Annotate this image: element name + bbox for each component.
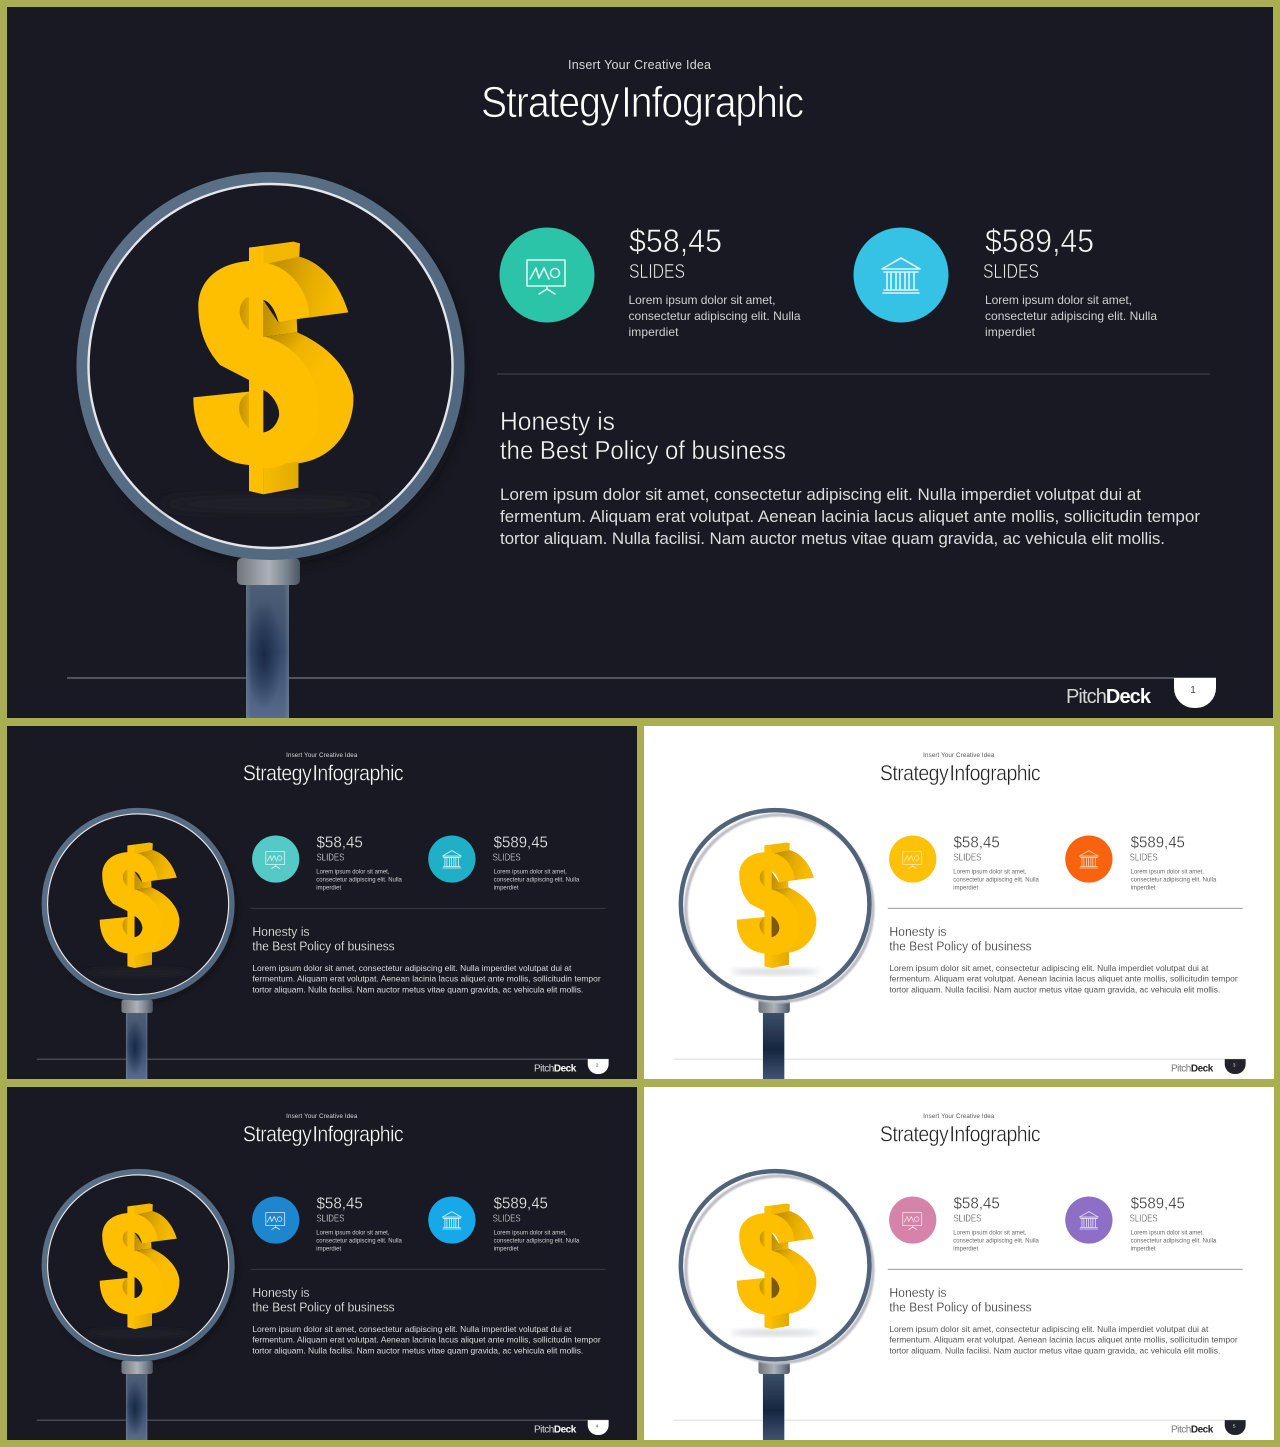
subtitle: Insert Your Creative Idea (568, 58, 711, 72)
body text: tortor aliquam. Nulla facilisi. Nam auctor metus vitae quam gravida, ac vehicula elit mollis. (500, 529, 1165, 548)
stat 2: SLIDES (493, 1214, 521, 1225)
stat 2: Lorem ipsum dolor sit amet, (985, 293, 1132, 307)
body text: Lorem ipsum dolor sit amet, consectetur adipiscing elit. Nulla imperdiet volutpat dui at (889, 963, 1209, 973)
subtitle: Insert Your Creative Idea (923, 752, 995, 759)
logo: PitchDeck (1171, 1425, 1214, 1436)
logo: PitchDeck (534, 1425, 577, 1436)
stat 2 (428, 1196, 580, 1252)
heading: the Best Policy of business (889, 938, 1032, 953)
heading: Honesty is (889, 1285, 947, 1300)
stat 2: $589,45 (1131, 835, 1185, 852)
icon: presentation board (252, 1196, 299, 1244)
footer line (67, 677, 1216, 679)
body text: fermentum. Aliquam erat volutpat. Aenean lacinia lacus aliquet ante mollis, sollicitudin tempor (889, 1335, 1238, 1345)
body text (252, 1324, 601, 1356)
page tab (588, 1059, 609, 1074)
stat 2: consectetur adipiscing elit. Nulla (494, 1238, 580, 1244)
magnifying glass with dollar (44, 1172, 236, 1440)
stat 1: consectetur adipiscing elit. Nulla (316, 1238, 403, 1244)
stat 2: imperdiet (1131, 1246, 1156, 1252)
heading (500, 406, 786, 465)
icon: presentation board (500, 228, 594, 322)
icon: presentation board (889, 835, 936, 883)
stat 1: SLIDES (317, 1214, 345, 1225)
stat 1: $58,45 (954, 835, 1000, 852)
stat 1: $58,45 (954, 1196, 1000, 1213)
stat 1 (889, 835, 1040, 891)
stat 2: $589,45 (494, 835, 548, 852)
magnifying glass with dollar (681, 1171, 873, 1440)
icon: 3D dollar sign (100, 843, 179, 968)
stat 2: consectetur adipiscing elit. Nulla (1131, 877, 1217, 883)
stat 1: $58,45 (629, 223, 722, 259)
title: Strategy Infographic (243, 761, 404, 786)
stat 1: Lorem ipsum dolor sit amet, (628, 293, 776, 307)
stat 2: imperdiet (985, 325, 1036, 339)
subtitle: Insert Your Creative Idea (923, 1113, 995, 1120)
stat 1: imperdiet (628, 325, 679, 339)
body text: Lorem ipsum dolor sit amet, consectetur adipiscing elit. Nulla imperdiet volutpat dui at (252, 1324, 572, 1334)
slide 4: small dark slide (7, 1087, 637, 1440)
page tab (588, 1420, 609, 1435)
slide 1: large dark slide (7, 7, 1273, 718)
stat 2: SLIDES (1130, 853, 1158, 864)
page tab: 5 (1233, 1424, 1236, 1430)
stat 1: consectetur adipiscing elit. Nulla (953, 1238, 1040, 1244)
heading: the Best Policy of business (500, 435, 786, 465)
magnifying glass with dollar (44, 811, 236, 1079)
stat 1: consectetur adipiscing elit. Nulla (316, 877, 403, 883)
heading (889, 924, 1032, 953)
body text (889, 1324, 1238, 1356)
title: Strategy Infographic (481, 78, 803, 127)
stat 2 (1065, 1196, 1217, 1252)
body text: tortor aliquam. Nulla facilisi. Nam auctor metus vitae quam gravida, ac vehicula elit mollis. (252, 1346, 583, 1356)
stat 1 (252, 835, 403, 891)
body text: Lorem ipsum dolor sit amet, consectetur adipiscing elit. Nulla imperdiet volutpat dui at (889, 1324, 1209, 1334)
stat 2: consectetur adipiscing elit. Nulla (494, 877, 580, 883)
body text: tortor aliquam. Nulla facilisi. Nam auctor metus vitae quam gravida, ac vehicula elit mollis. (889, 1346, 1220, 1356)
stat 2: Lorem ipsum dolor sit amet, (1131, 869, 1204, 875)
heading: Honesty is (889, 924, 947, 939)
body text: Lorem ipsum dolor sit amet, consectetur adipiscing elit. Nulla imperdiet volutpat dui at (252, 963, 572, 973)
slide 2: small dark slide (7, 726, 637, 1079)
body text (252, 963, 601, 995)
stat 1: SLIDES (317, 853, 345, 864)
stat 2: Lorem ipsum dolor sit amet, (494, 1230, 567, 1236)
stat 1: SLIDES (954, 1214, 982, 1225)
logo: PitchDeck (1171, 1064, 1214, 1075)
heading (252, 924, 395, 953)
icon: bank (1065, 1196, 1113, 1244)
stat 2: imperdiet (494, 1246, 519, 1252)
stat 2 (854, 223, 1157, 339)
logo: PitchDeck (1066, 686, 1152, 708)
icon: 3D dollar sign (737, 1204, 816, 1329)
stat 1: Lorem ipsum dolor sit amet, (953, 869, 1027, 875)
stat 2: SLIDES (1130, 1214, 1158, 1225)
title: Strategy Infographic (880, 761, 1041, 786)
body text (500, 485, 1200, 548)
icon: bank (1065, 835, 1113, 883)
body text (889, 963, 1238, 995)
stat 2: SLIDES (983, 261, 1039, 283)
body text: fermentum. Aliquam erat volutpat. Aenean lacinia lacus aliquet ante mollis, sollicitudin tempor (252, 1335, 601, 1345)
stat 1: Lorem ipsum dolor sit amet, (316, 869, 390, 875)
heading (889, 1285, 1032, 1314)
body text: tortor aliquam. Nulla facilisi. Nam auctor metus vitae quam gravida, ac vehicula elit mollis. (252, 985, 583, 995)
stat 2 (428, 835, 580, 891)
icon: bank (428, 1196, 476, 1244)
body text: Lorem ipsum dolor sit amet, consectetur adipiscing elit. Nulla imperdiet volutpat dui at (500, 485, 1141, 504)
stat 2: $589,45 (1131, 1196, 1185, 1213)
icon: presentation board (252, 835, 299, 883)
stat 1: imperdiet (953, 885, 979, 891)
heading: the Best Policy of business (252, 1299, 395, 1314)
title: Strategy Infographic (243, 1122, 404, 1147)
icon: bank (854, 228, 948, 322)
stat 1: $58,45 (317, 1196, 363, 1213)
stat 1 (252, 1196, 403, 1252)
stat 1: imperdiet (316, 1246, 342, 1252)
title: Strategy Infographic (880, 1122, 1041, 1147)
heading: the Best Policy of business (252, 938, 395, 953)
stat 1 (500, 223, 801, 339)
slide 3: small light slide (644, 726, 1274, 1079)
page tab: 3 (1233, 1063, 1236, 1069)
slide 5: small light slide (644, 1087, 1274, 1440)
page tab: 2 (596, 1063, 599, 1069)
stat 1: Lorem ipsum dolor sit amet, (316, 1230, 390, 1236)
stat 2 (1065, 835, 1217, 891)
stat 2: imperdiet (1131, 885, 1156, 891)
stat 1: imperdiet (316, 885, 342, 891)
stat 2: $589,45 (985, 223, 1094, 259)
stat 1: $58,45 (317, 835, 363, 852)
stat 2: Lorem ipsum dolor sit amet, (1131, 1230, 1204, 1236)
icon: 3D dollar sign (737, 843, 816, 968)
stat 2: consectetur adipiscing elit. Nulla (985, 309, 1157, 323)
subtitle: Insert Your Creative Idea (286, 1113, 358, 1120)
page tab: 4 (596, 1424, 599, 1430)
stat 2: consectetur adipiscing elit. Nulla (1131, 1238, 1217, 1244)
icon: presentation board (889, 1196, 936, 1244)
heading (252, 1285, 395, 1314)
stat 2: $589,45 (494, 1196, 548, 1213)
stat 2: Lorem ipsum dolor sit amet, (494, 869, 567, 875)
heading: Honesty is (500, 406, 615, 436)
heading: Honesty is (252, 924, 310, 939)
stat 1: imperdiet (953, 1246, 979, 1252)
stat 1: SLIDES (954, 853, 982, 864)
page tab: 1 (1190, 685, 1196, 696)
body text: fermentum. Aliquam erat volutpat. Aenean lacinia lacus aliquet ante mollis, sollicitudin tempor (252, 974, 601, 984)
magnifying glass with dollar (82, 178, 467, 718)
stat 1: SLIDES (629, 261, 685, 283)
icon: bank (428, 835, 476, 883)
body text: tortor aliquam. Nulla facilisi. Nam auctor metus vitae quam gravida, ac vehicula elit mollis. (889, 985, 1220, 995)
body text: fermentum. Aliquam erat volutpat. Aenean lacinia lacus aliquet ante mollis, sollicitudin tempor (889, 974, 1238, 984)
page tab (1225, 1420, 1246, 1435)
stat 2: imperdiet (494, 885, 519, 891)
heading: Honesty is (252, 1285, 310, 1300)
stat 1: consectetur adipiscing elit. Nulla (628, 309, 801, 323)
page tab (1174, 678, 1216, 708)
heading: the Best Policy of business (889, 1299, 1032, 1314)
icon: 3D dollar sign (100, 1204, 179, 1329)
magnifying glass with dollar (681, 810, 873, 1079)
logo: PitchDeck (534, 1064, 577, 1075)
page tab (1225, 1059, 1246, 1074)
stat 2: SLIDES (493, 853, 521, 864)
body text: fermentum. Aliquam erat volutpat. Aenean lacinia lacus aliquet ante mollis, sollicitudin tempor (500, 507, 1200, 526)
icon: 3D dollar sign (193, 242, 353, 494)
stat 1 (889, 1196, 1040, 1252)
stat 1: Lorem ipsum dolor sit amet, (953, 1230, 1027, 1236)
stat 1: consectetur adipiscing elit. Nulla (953, 877, 1040, 883)
subtitle: Insert Your Creative Idea (286, 752, 358, 759)
